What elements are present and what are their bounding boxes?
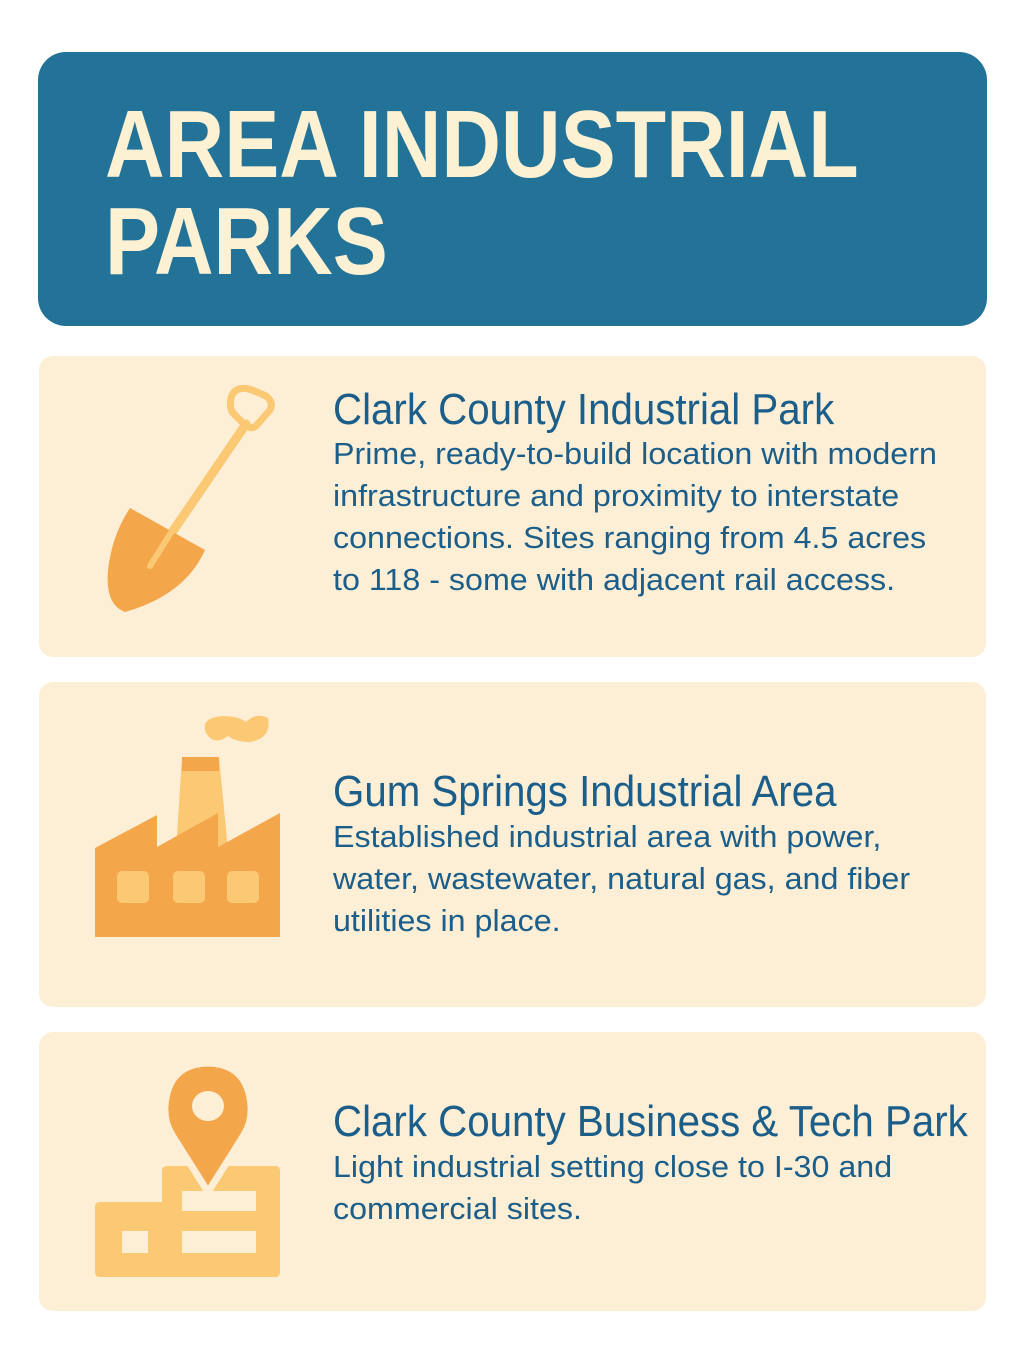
heading: Clark County Business & Tech Park: Clark County Business & Tech Park bbox=[333, 1097, 968, 1146]
text: park 2 description bbox=[333, 819, 910, 938]
text: park 2 description: utilities in place. bbox=[333, 903, 561, 938]
panel: Clark County Business & Tech Park bbox=[39, 1032, 986, 1311]
text: park 2 description: water, wastewater, natural gas, and fiber bbox=[333, 861, 910, 896]
title: AREA INDUSTRIAL bbox=[105, 91, 859, 198]
text: park 1 description: infrastructure and proximity to interstate bbox=[333, 478, 899, 513]
text: park 1 description: to 118 - some with adjacent rail access. bbox=[333, 562, 895, 597]
heading: Gum Springs Industrial Area: Gum Springs Industrial Area bbox=[333, 767, 836, 816]
title bbox=[105, 91, 859, 295]
text: park 1 description bbox=[333, 436, 937, 597]
heading: Clark County Industrial Park: Clark County Industrial Park bbox=[333, 385, 834, 434]
text: park 1 description: connections. Sites ranging from 4.5 acres bbox=[333, 520, 926, 555]
text: park 2 description: Established industrial area with power, bbox=[333, 819, 881, 854]
title: PARKS bbox=[105, 188, 388, 295]
text: park 1 description: Prime, ready-to-build location with modern bbox=[333, 436, 937, 471]
text: park 3 description: commercial sites. bbox=[333, 1191, 582, 1226]
header banner bbox=[38, 52, 987, 326]
text: park 3 description: Light industrial setting close to I-30 and bbox=[333, 1149, 892, 1184]
panel: Clark County Industrial Park bbox=[39, 356, 986, 657]
text: park 3 description bbox=[333, 1149, 892, 1226]
panel: Gum Springs Industrial Area bbox=[39, 682, 986, 1007]
